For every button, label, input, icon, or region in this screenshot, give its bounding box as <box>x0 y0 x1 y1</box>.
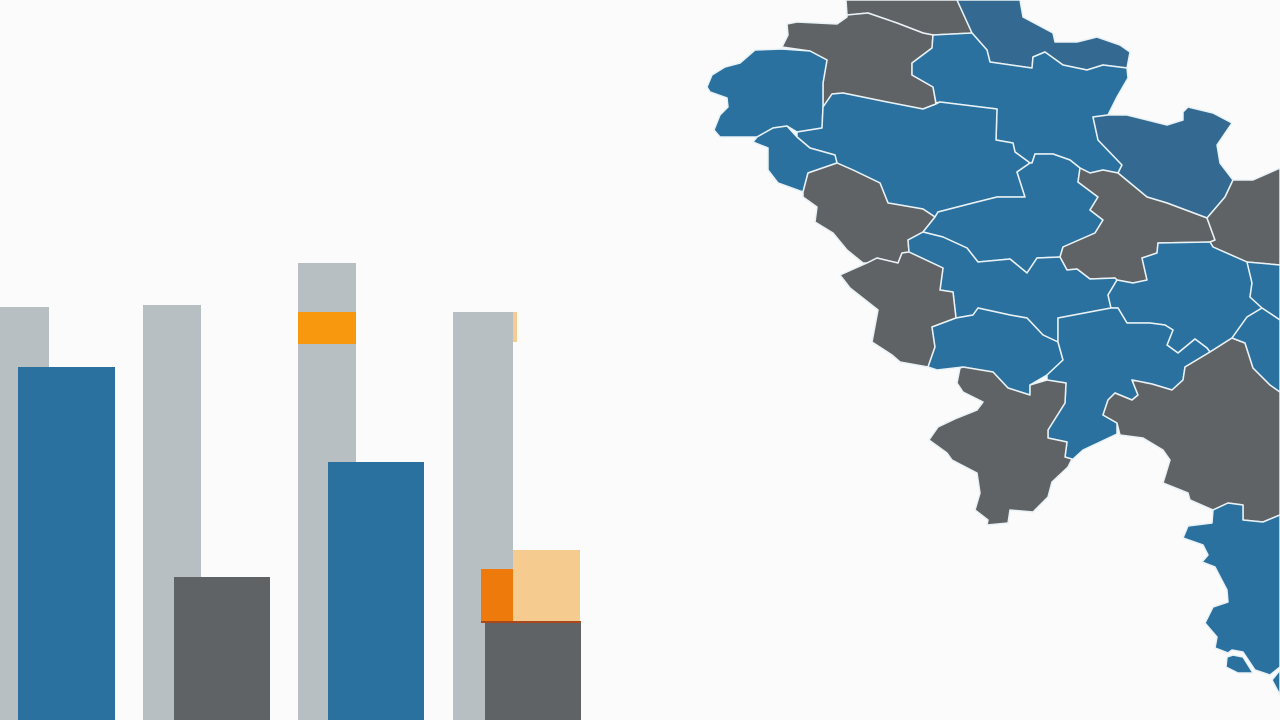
regional map <box>707 0 1280 695</box>
bar group 4 <box>453 312 581 720</box>
bar group 3 <box>298 263 424 720</box>
bar group 1 <box>0 307 115 720</box>
bar chart <box>0 263 581 720</box>
bar group 2 <box>143 305 270 720</box>
